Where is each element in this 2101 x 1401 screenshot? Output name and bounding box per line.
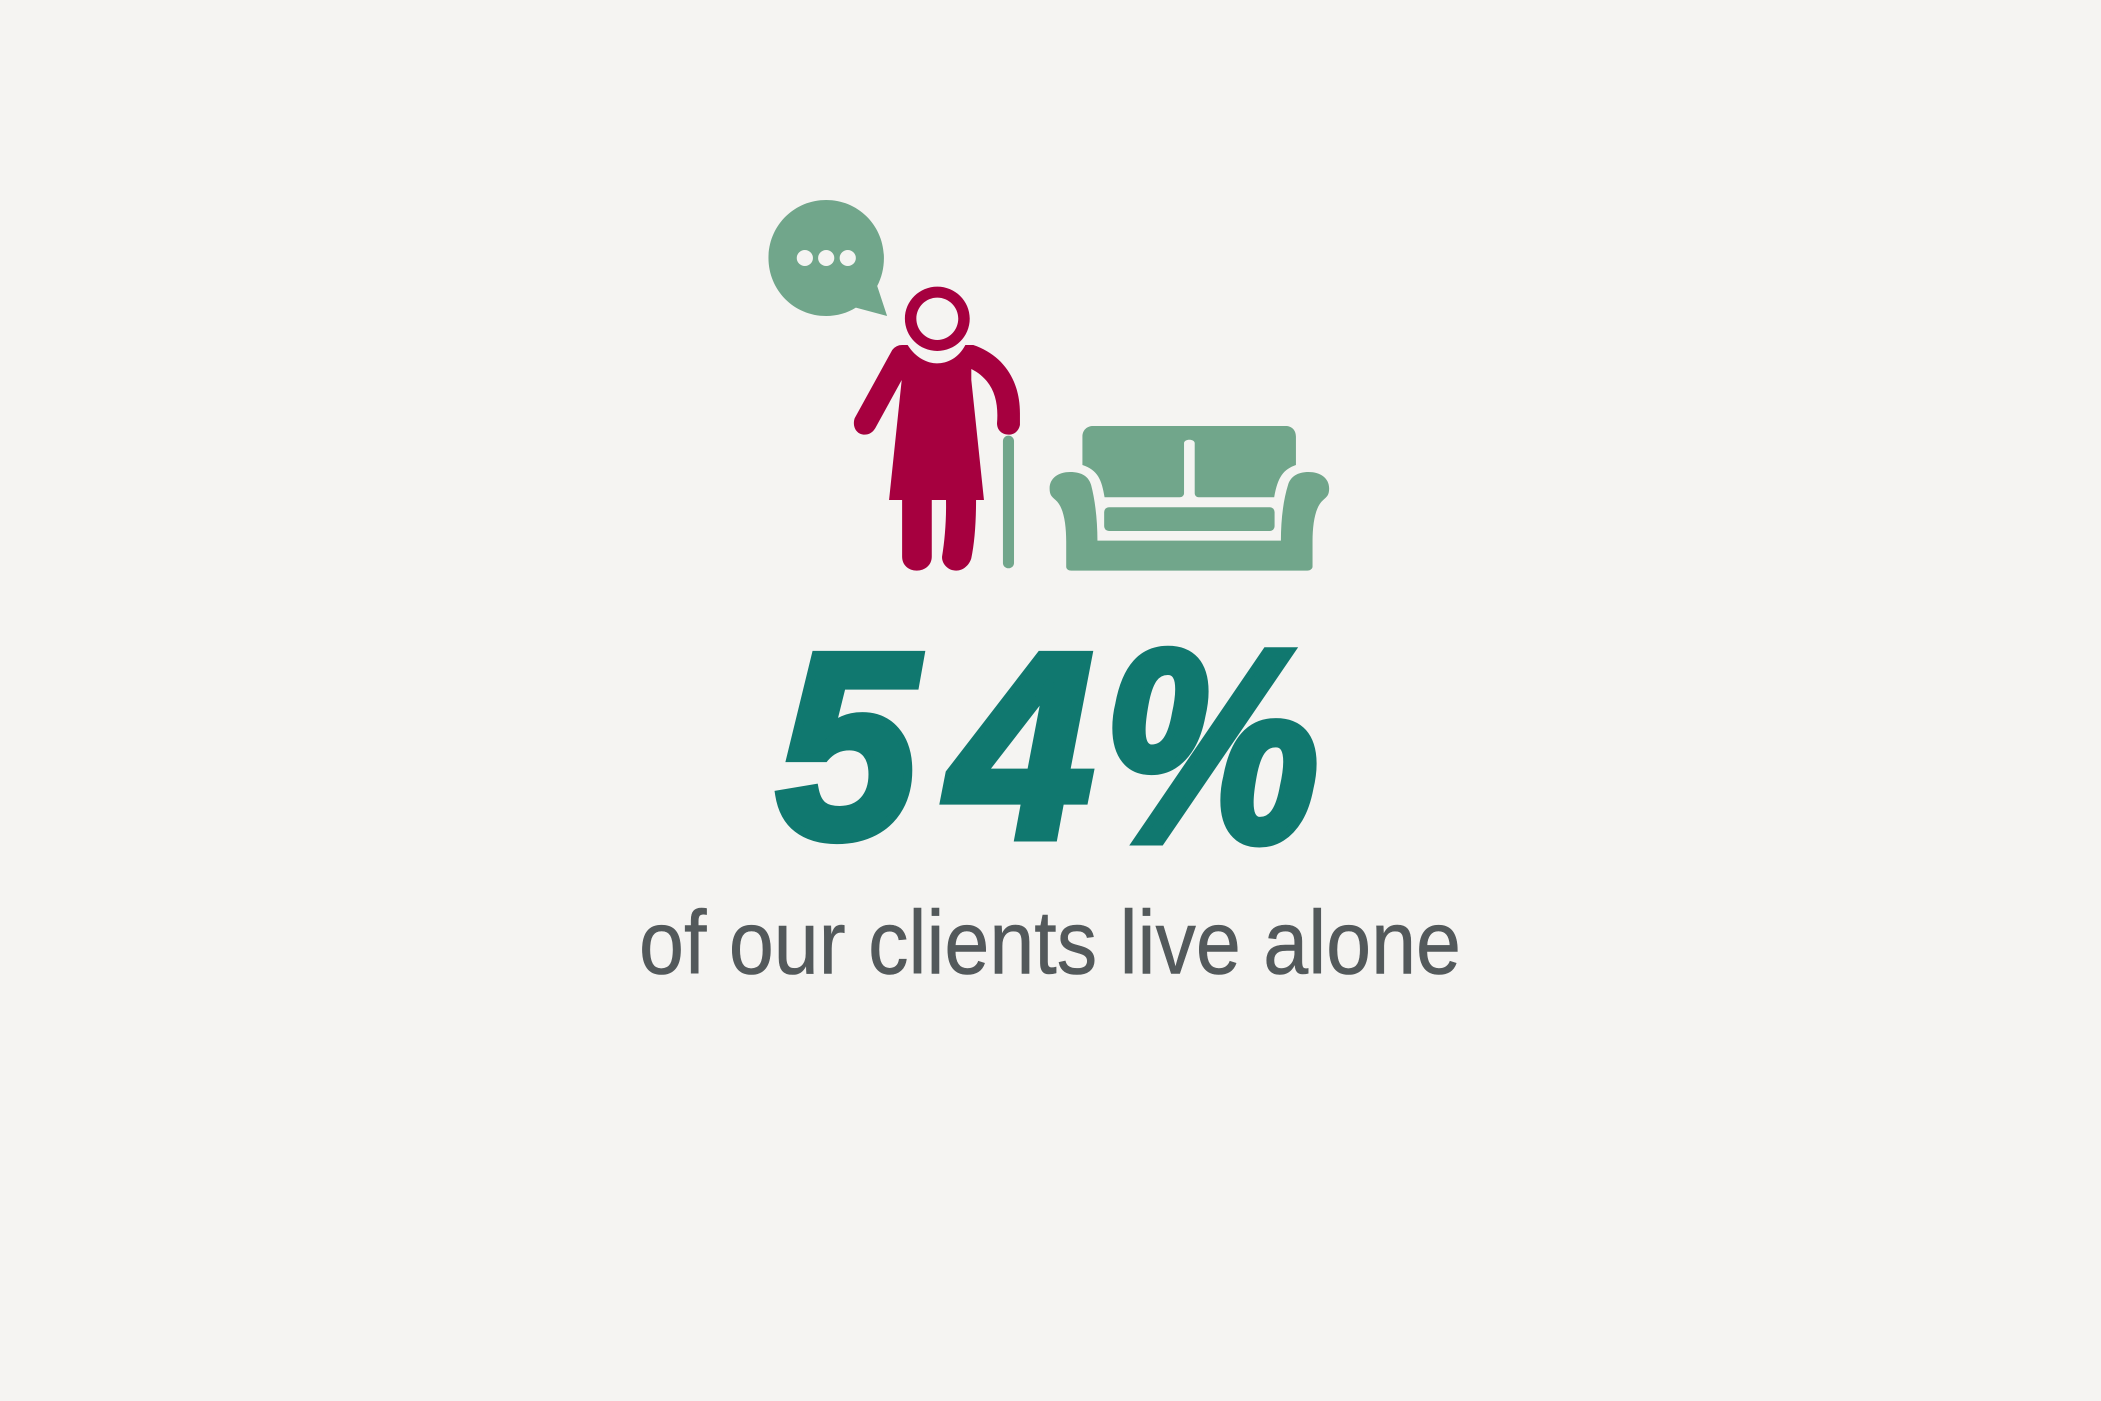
icon: walking cane (1003, 436, 1014, 568)
icon: sofa (1050, 426, 1329, 571)
illustration: person, speech bubble, cane and sofa (768, 200, 1329, 571)
statistic: 54%: 4 (949, 598, 1094, 892)
statistic: 54% (774, 593, 1319, 900)
icon: speech bubble (768, 200, 887, 316)
caption: of our clients live alone (639, 894, 1461, 994)
statistic: 54%: 5 (777, 598, 917, 892)
icon: elderly woman (854, 287, 1020, 571)
statistic: 54%: % (1103, 593, 1319, 900)
